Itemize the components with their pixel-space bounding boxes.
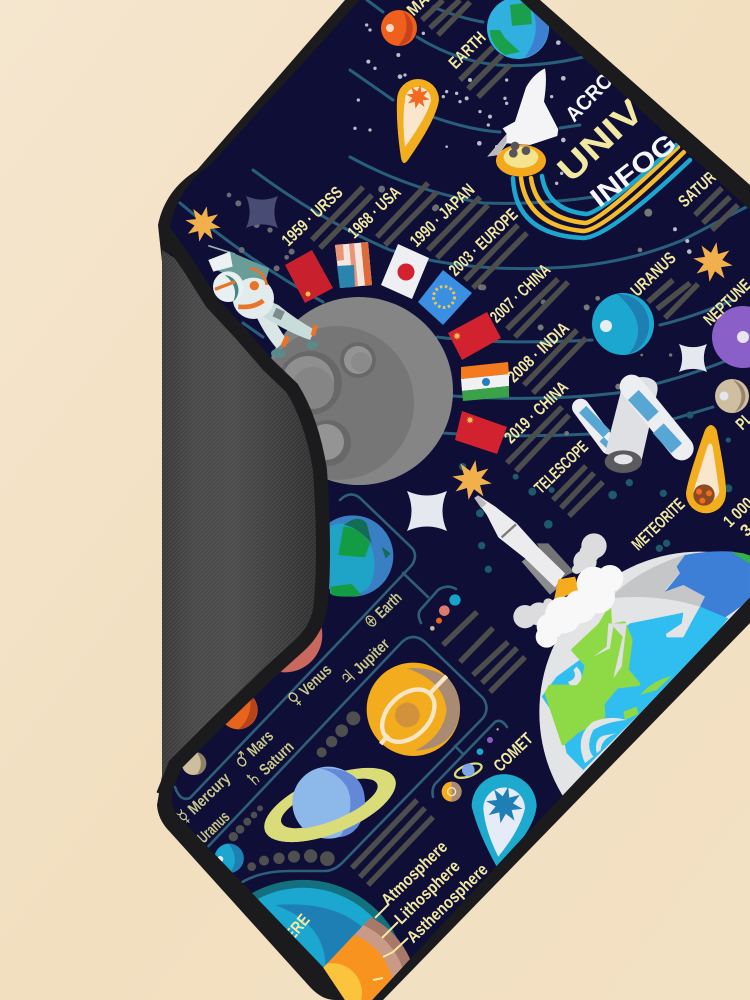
- label: Meteorite: METEORITE: [628, 495, 689, 554]
- label: 2019 China: 2019 · CHINA: [501, 377, 572, 447]
- pointer lines: [373, 905, 408, 980]
- size dots row: [229, 711, 360, 871]
- grey label bars: [312, 0, 738, 885]
- space shuttle with rainbow trail: [487, 68, 690, 238]
- planet: Pluto: [715, 379, 749, 413]
- ringed planet: Saturn: [264, 766, 396, 842]
- comet blue: [472, 774, 537, 867]
- label: Asthenosphere: Asthenosphere: [403, 860, 492, 947]
- mouse pad artwork panel: [150, 0, 750, 1000]
- orbit lines: [180, 0, 750, 436]
- big Earth (lower right): [539, 551, 750, 796]
- comet orange: [397, 79, 439, 163]
- cutaway planet: Earth layers: [198, 880, 417, 1000]
- grey dust dots: [227, 186, 546, 330]
- label: Uranus: URANUS: [627, 248, 680, 300]
- flag: Europe: [418, 270, 472, 325]
- label: Saturn: SATUR: [675, 168, 720, 211]
- label: Telescope: TELESCOPE: [531, 437, 592, 497]
- label: 1990 Japan: 1990 · JAPAN: [406, 180, 478, 251]
- frame lines around planet panels: [175, 494, 507, 887]
- label: Atmosphere: Atmosphere: [378, 837, 451, 909]
- rocket launch with smoke: [474, 495, 623, 648]
- planet: Mars partial: [226, 698, 258, 730]
- planet: small Uranus: [214, 844, 244, 873]
- label: 2003 Europe: 2003 · EUROPE: [445, 205, 522, 280]
- label: 1959 USSR: 1959 · URSS: [278, 183, 347, 250]
- mouse pad black stitched border: [157, 0, 750, 1000]
- planet: Uranus: [592, 293, 654, 355]
- title text: UNIV: [550, 91, 652, 190]
- starfield dots: [353, 23, 692, 290]
- label: Mars symbol: ♂ Mars: [230, 725, 278, 773]
- flag: China 2007: [448, 312, 501, 360]
- teal dust dots: [459, 296, 732, 573]
- flag: USSR: [285, 250, 333, 303]
- planet: Mars: [381, 10, 417, 46]
- mini planets beside comet: [442, 728, 499, 802]
- label: Jupiter symbol: ♃ Jupiter: [336, 633, 394, 690]
- decorative stars: [182, 196, 736, 531]
- label: Comet: COMET: [490, 729, 537, 775]
- cutaway planet: Jupiter: [367, 663, 460, 756]
- label: Ere: ERE: [281, 910, 314, 944]
- label: 2008 India: 2008 · INDIA: [504, 318, 573, 386]
- label: Venus symbol: ♀ Venus: [283, 659, 336, 711]
- folded pad stitched edge: [163, 232, 323, 795]
- shuttle body: [487, 68, 558, 177]
- label: 1968 USA: 1968 · USA: [344, 183, 405, 242]
- title text: ACRO: [561, 69, 618, 126]
- label: Earth symbol: ⊕ Earth: [359, 587, 406, 633]
- label: Uranus symbol: ♅ Uranus: [181, 806, 234, 858]
- moon with craters: [260, 297, 453, 485]
- title text: [556, 74, 675, 207]
- planet: Earth (panel): [328, 515, 394, 597]
- planet: Venus partial: [280, 628, 322, 672]
- folded pad underside fabric: [162, 250, 323, 778]
- labels: [173, 0, 750, 947]
- label: Lithosphere: Lithosphere: [391, 857, 464, 928]
- planet: Mercury partial: [182, 752, 206, 775]
- label: Saturn symbol: ♄ Saturn: [241, 736, 298, 792]
- label: Mercury symbol: ☿ Mercury: [173, 767, 235, 828]
- astronaut: [208, 246, 318, 358]
- flag: India: [461, 362, 509, 401]
- label: Earth: EARTH: [445, 28, 490, 73]
- mini planet row (top): [430, 594, 461, 631]
- Hubble telescope: [581, 377, 682, 473]
- flag: USA: [335, 242, 372, 288]
- rainbow trail: [513, 145, 690, 238]
- flag: China 2019: [455, 411, 507, 454]
- label: 2007 China: 2007 · CHINA: [486, 260, 554, 327]
- title text: INFOG: [585, 128, 682, 213]
- planet: Neptune: [712, 306, 750, 368]
- meteorite: [686, 425, 726, 513]
- flag: Japan: [381, 244, 429, 299]
- flags: [285, 242, 509, 454]
- planet: Earth (top): [487, 0, 549, 59]
